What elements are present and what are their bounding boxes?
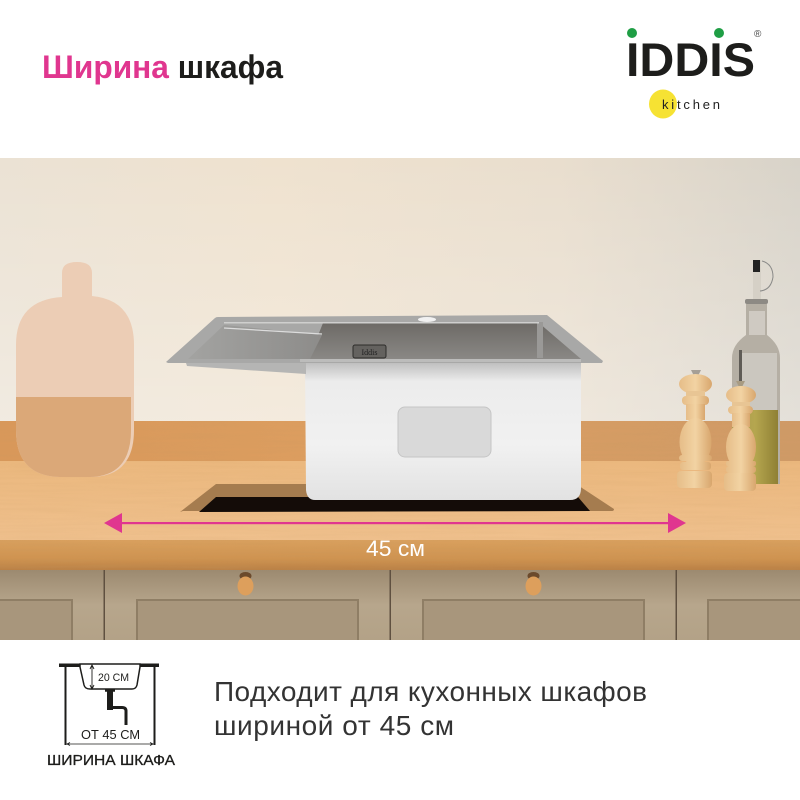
cabinet knobs (238, 572, 542, 596)
drain pipe (105, 690, 126, 725)
drainboard underside (186, 363, 306, 374)
countertop (0, 461, 800, 541)
width label: 45 см (366, 536, 425, 561)
width dimension arrow (67, 742, 153, 746)
description text: Подходит для кухонных шкафов (214, 676, 647, 707)
width arrow (104, 513, 686, 533)
wall (0, 158, 800, 422)
drainboard (188, 325, 322, 359)
logo: IDDIS kitchen: ® (754, 29, 762, 40)
cabinet walls (66, 667, 154, 745)
sink body (305, 362, 581, 500)
overflow badge: Iddis (362, 348, 378, 357)
countertop edge (0, 540, 800, 571)
diagram caption: ШИРИНА ШКАФА (47, 753, 175, 769)
pepper mill small (724, 381, 756, 491)
pepper mill large (677, 370, 712, 488)
kitchen photo (0, 158, 800, 640)
cutting board (16, 262, 134, 477)
logo: IDDIS kitchen: kitchen (662, 97, 720, 112)
от 45 см label: ОТ 45 СМ (81, 727, 140, 742)
cabinet width diagram (47, 664, 175, 769)
countertop line (59, 664, 159, 667)
cabinets (0, 570, 800, 640)
logo: IDDIS kitchen (626, 28, 762, 118)
faucet hole (418, 317, 436, 322)
sink (166, 315, 603, 500)
description text: шириной от 45 см (214, 710, 454, 741)
depth arrow (90, 665, 94, 689)
backsplash (0, 421, 800, 461)
side panel (398, 407, 491, 457)
countertop cutout (180, 484, 614, 512)
oil bottle (732, 260, 780, 484)
basin outline (80, 664, 140, 689)
basin (309, 323, 581, 359)
title: Ширина шкафа (42, 49, 283, 85)
rim (166, 315, 603, 363)
logo: IDDIS kitchen: IDDIS (626, 33, 755, 86)
20 см label: 20 СМ (98, 672, 129, 684)
overflow badge (353, 345, 386, 358)
